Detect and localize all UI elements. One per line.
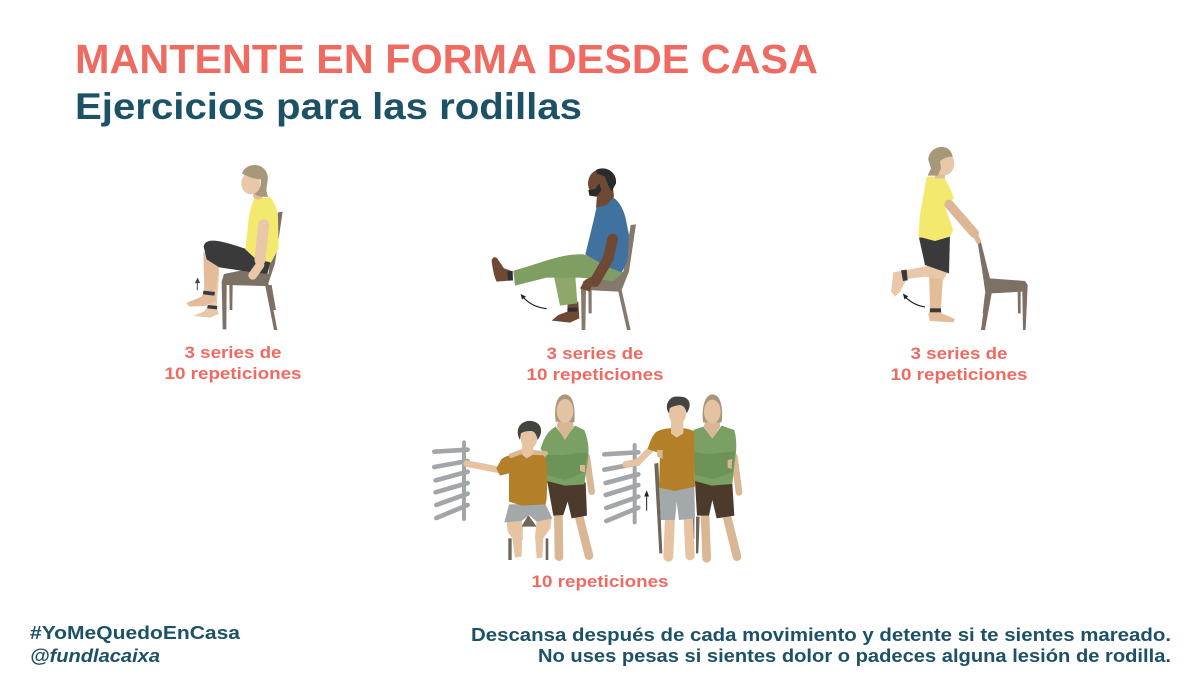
chair — [978, 242, 1028, 330]
hair — [242, 165, 268, 197]
helper hand on shoulder — [511, 452, 546, 456]
chair — [654, 463, 700, 553]
arrow up — [645, 492, 648, 511]
helper neck — [704, 417, 720, 438]
patient neck — [671, 418, 683, 438]
beard — [588, 183, 601, 197]
arm — [595, 239, 613, 282]
patient hair — [667, 396, 690, 413]
seated legs — [507, 520, 522, 558]
wall bars — [604, 445, 638, 522]
figure: assisted standing with helper — [604, 394, 739, 558]
figure: seated woman lifting ankle — [186, 165, 283, 330]
figure: assisted sitting with helper — [434, 394, 592, 560]
wall bars — [434, 442, 468, 519]
figure: standing woman bending knee — [891, 147, 1028, 330]
hashtag and handle — [30, 622, 241, 666]
label: exercise 3 — [890, 344, 1028, 384]
label: exercise 1: 10 repeticiones — [164, 364, 302, 383]
helper neck — [557, 417, 574, 440]
helper shorts — [695, 481, 734, 518]
hashtag and handle: @fundlacaixa — [30, 645, 160, 666]
yellow shirt — [245, 197, 279, 263]
raised shin and foot — [186, 252, 219, 307]
seated hair — [518, 421, 541, 440]
label: exercise 2: 3 series de — [546, 344, 644, 363]
patient face — [669, 402, 686, 425]
shorts — [204, 241, 271, 274]
subtitle: Ejercicios para las rodillas — [75, 86, 582, 127]
label: exercise 4: 10 repeticiones — [532, 572, 668, 591]
hair — [928, 147, 953, 176]
head — [588, 169, 613, 197]
label: exercise 1 — [164, 343, 302, 383]
label: exercise 1: 3 series de — [184, 343, 282, 362]
seated neck — [522, 445, 533, 458]
seated shirt — [496, 453, 547, 506]
label: exercise 2 — [526, 344, 664, 384]
helper face — [704, 400, 721, 424]
helper face — [557, 399, 573, 423]
helper hair — [555, 394, 575, 422]
neck — [935, 167, 946, 178]
bent leg and foot — [891, 266, 948, 297]
chair — [222, 212, 283, 330]
label: exercise 2: 10 repeticiones — [526, 365, 664, 384]
back leg and foot — [193, 263, 219, 318]
face — [934, 151, 954, 175]
face — [241, 172, 260, 194]
standing lower leg and foot — [552, 302, 579, 323]
helper shirt — [693, 426, 736, 486]
safety note — [471, 624, 1171, 666]
patient legs — [668, 517, 670, 557]
blue shirt — [585, 197, 629, 272]
neck — [251, 187, 263, 199]
standing leg and foot — [928, 272, 955, 322]
figure: seated man extending leg — [492, 168, 636, 330]
helper hair — [703, 394, 722, 422]
helper hands — [657, 450, 732, 469]
extended leg trousers — [513, 254, 623, 286]
patient shirt — [648, 428, 695, 491]
helper shirt — [541, 426, 589, 486]
helper legs — [705, 513, 707, 558]
patient arm — [626, 449, 651, 464]
helper legs — [545, 512, 572, 557]
neck — [596, 185, 614, 208]
helper arm — [587, 457, 592, 492]
safety note: No uses pesas si sientes dolor o padeces alguna lesión de rodilla. — [538, 645, 1171, 666]
seated face — [521, 426, 537, 449]
bent leg trousers — [554, 272, 577, 306]
curved arrow — [905, 297, 925, 307]
safety note: Descansa después de cada movimiento y detente si te sientes mareado. — [471, 624, 1171, 645]
title: MANTENTE EN FORMA DESDE CASA — [75, 36, 818, 82]
raised foot — [492, 257, 513, 282]
arrow up — [196, 279, 199, 290]
chair — [581, 224, 636, 330]
helper arm — [734, 457, 739, 492]
shorts — [919, 235, 950, 273]
seated arm — [467, 464, 500, 470]
chair — [508, 515, 548, 560]
yellow shirt — [918, 177, 954, 241]
hair — [596, 168, 616, 192]
seated shorts — [504, 503, 552, 522]
arm — [260, 225, 264, 260]
curved arrow — [523, 297, 547, 309]
label: exercise 3: 3 series de — [910, 344, 1008, 363]
hashtag and handle: #YoMeQuedoEnCasa — [30, 622, 241, 643]
helper shorts — [547, 480, 587, 518]
patient shorts — [659, 487, 695, 520]
label: exercise 3: 10 repeticiones — [890, 365, 1028, 384]
arm — [949, 204, 974, 233]
